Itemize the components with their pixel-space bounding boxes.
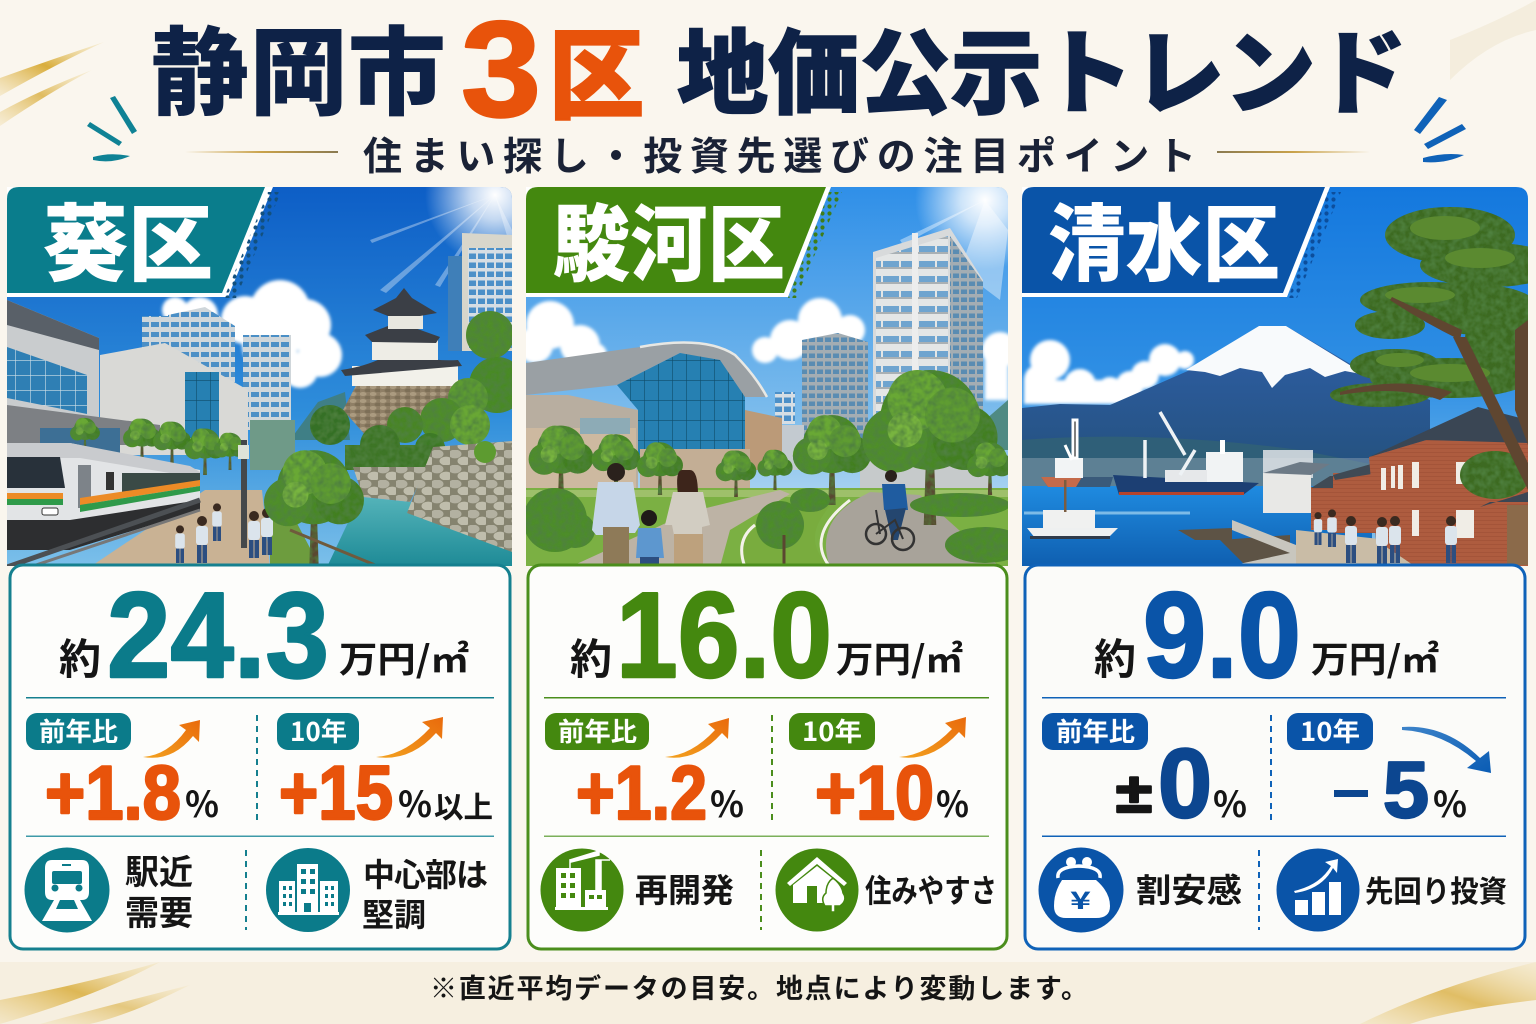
stat: year on year: ±: [1116, 761, 1152, 824]
harbor buildings: [1263, 407, 1528, 567]
cyclist: [866, 470, 914, 550]
ships: [1027, 412, 1259, 539]
title: land price trend: 地価公示トレンド: [677, 0, 1407, 133]
footnote: ※直近平均データの目安。地点により変動します。: [430, 967, 1088, 1006]
panel: Suruga ward: [526, 187, 1008, 950]
scene: Shimizu Fuji and harbor: [1022, 187, 1536, 570]
label: station demand: 駅近: [125, 845, 193, 894]
label: station demand: 需要: [125, 886, 193, 935]
price: 16.0: [616, 567, 832, 703]
stat: year on year: %: [185, 776, 219, 828]
price: 万円/㎡: [339, 631, 469, 683]
stat: year on year: %: [1213, 776, 1247, 828]
stat: year on year: +1.8: [45, 751, 181, 836]
ward banner: Aoi: [7, 178, 281, 299]
stat: year on year: 前年比: [558, 712, 637, 749]
arrow up: [143, 720, 200, 758]
pine tree: [1330, 207, 1536, 499]
stat: year on year: 前年比: [1056, 712, 1135, 749]
arrow up: [899, 717, 966, 758]
title: city name: 静岡市: [151, 0, 446, 135]
label: center solid: 中心部は: [363, 850, 488, 896]
label: redevelopment: 再開発: [635, 864, 734, 912]
price: 万円/㎡: [836, 631, 963, 683]
price: 9.0: [1143, 567, 1301, 703]
panel: Aoi ward: [7, 187, 512, 950]
stat: ten years: 10年: [1300, 712, 1360, 749]
subtitle: 住まい探し・投資先選びの注目ポイント: [363, 126, 1196, 182]
label: center solid: 堅調: [362, 890, 426, 936]
stat: ten years: 10年: [802, 712, 862, 749]
icon: house and tree: [776, 848, 858, 932]
icon: blue rays right: [1414, 97, 1466, 162]
stat: year on year: [1042, 712, 1247, 838]
stat: ten years: +10: [815, 751, 934, 836]
icon: teal rays left: [87, 96, 137, 161]
price card: Aoi: [10, 565, 510, 949]
stat: ten years: [1287, 712, 1491, 834]
price: 約: [570, 626, 612, 687]
stat: year on year: +1.2: [576, 751, 707, 836]
icon: coin purse: [1038, 848, 1124, 932]
title: orange ward: 区: [549, 0, 644, 139]
price: 約: [1094, 626, 1136, 687]
ward banner: Shimizu: 清水区: [1048, 178, 1280, 299]
stat: year on year: 前年比: [39, 712, 118, 749]
price: 24.3: [107, 567, 329, 703]
icon: coin purse: ¥: [1070, 881, 1091, 916]
stat: year on year: %: [710, 776, 744, 828]
label: station demand: [125, 845, 193, 935]
icon: buildings: [266, 848, 350, 932]
stat: ten years: +15: [279, 751, 393, 836]
icon: train: [24, 848, 110, 932]
stat: year on year: [545, 712, 744, 836]
label: early investment: 先回り投資: [1365, 867, 1507, 911]
stat: year on year: [26, 712, 219, 836]
stat: ten years: %: [1433, 776, 1467, 828]
label: livability: 住みやすさ: [865, 866, 997, 912]
stat: ten years: [789, 712, 969, 836]
arrow up: [376, 717, 443, 758]
stat: ten years: [277, 712, 493, 836]
price: 万円/㎡: [1311, 631, 1439, 683]
icon: redevelopment crane: [540, 848, 624, 932]
label: center solid: [362, 850, 488, 936]
people: family: [592, 463, 710, 567]
panel: Shimizu ward: [1022, 178, 1536, 949]
icon: rising chart: [1276, 848, 1360, 932]
price: [1094, 567, 1439, 703]
price: [570, 567, 963, 703]
scene: Suruga hall and park: [526, 187, 1008, 566]
price: [59, 567, 469, 703]
scene: Aoi castle and station: [7, 187, 512, 566]
ward banner: Suruga: 駿河区: [553, 178, 785, 299]
stat: ten years: 5: [1383, 745, 1429, 834]
stat: ten years: %: [398, 776, 432, 828]
stat: ten years: 10年: [290, 712, 347, 749]
stat: year on year: 0: [1158, 728, 1212, 838]
stat: ten years: 以上: [434, 783, 493, 827]
label: bargain: 割安感: [1136, 864, 1242, 912]
title: [151, 0, 1407, 145]
price: 約: [59, 626, 101, 687]
stat: ten years: %: [936, 776, 969, 828]
price card: Shimizu: [1025, 565, 1525, 949]
arrow down: [1402, 727, 1491, 773]
ward banner: Aoi: 葵区: [43, 178, 213, 299]
arrow up: [665, 718, 729, 758]
price card: Suruga: [528, 565, 1007, 949]
